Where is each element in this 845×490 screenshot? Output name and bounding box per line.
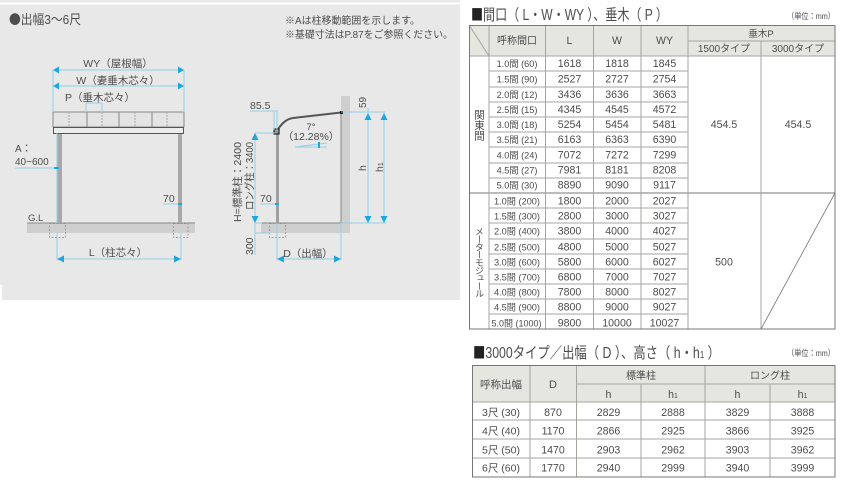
rows: metre module: 1.0間 (200) xyxy=(494,196,540,206)
rows: 3962 xyxy=(791,445,814,457)
rows: 2940 xyxy=(597,463,620,475)
dimension: h: h xyxy=(357,165,369,171)
rows: metre module: 3.5間 (700) xyxy=(494,272,540,282)
table header: WY xyxy=(656,35,673,47)
slope label: （12.28%） xyxy=(283,131,339,143)
rows: Kanto: 2.0間 (12) xyxy=(497,90,537,100)
rows: metre module: 4.5間 (900) xyxy=(494,303,540,313)
rows: Kanto: 7272 xyxy=(605,150,629,162)
rows: Kanto: 6390 xyxy=(653,134,676,146)
table header xyxy=(469,25,835,56)
rows: metre module: 8800 xyxy=(558,302,581,314)
roof xyxy=(53,112,184,134)
rows: 870 xyxy=(544,407,562,419)
dimension: W: W（妻垂木芯々） xyxy=(76,74,160,87)
dimension: H post height: ロング柱：3400 xyxy=(243,142,256,210)
table header: W xyxy=(612,35,622,47)
rows: metre module: 6800 xyxy=(558,271,581,283)
rows: metre module: 6027 xyxy=(653,256,676,268)
dimension: WY xyxy=(53,57,184,112)
dimension: W xyxy=(53,74,184,90)
rows: Kanto: 1845 xyxy=(653,58,676,70)
rows: metre module: 7800 xyxy=(558,286,581,298)
rows: metre module xyxy=(491,195,679,329)
rows: metre module: 5027 xyxy=(653,241,676,253)
rows: Kanto: 1.5間 (90) xyxy=(497,75,537,85)
rows: metre module: 5800 xyxy=(558,256,581,268)
dimension: 70 side: 70 xyxy=(260,193,272,205)
rows: metre module: 4.0間 (800) xyxy=(494,287,540,297)
rows: Kanto: 9117 xyxy=(653,180,676,192)
rows: metre module: 8000 xyxy=(605,286,629,298)
rows: 5尺 (50) xyxy=(482,445,520,457)
rows: metre module: 3.0間 (600) xyxy=(494,257,540,267)
label: G.L: G.L xyxy=(28,213,43,224)
rows: metre module: 10027 xyxy=(650,317,679,329)
dimension: H post height xyxy=(231,133,275,255)
dimension: H post height: H=標準柱：2400 xyxy=(231,142,244,222)
dimension: h1 xyxy=(374,112,388,223)
table header xyxy=(472,365,835,402)
rows: Kanto: 4572 xyxy=(653,104,676,116)
rows: 2999 xyxy=(661,463,685,475)
posts xyxy=(57,133,182,223)
rows: Kanto: 7072 xyxy=(558,150,581,162)
table header: L xyxy=(567,35,573,47)
rows: metre module: 4027 xyxy=(653,226,676,238)
slope label: 7° xyxy=(306,122,316,133)
rows: 3888 xyxy=(791,407,814,419)
merged cells: rafter pitch: 454.5 xyxy=(711,119,737,131)
dimension: P: P（垂木芯々） xyxy=(65,92,135,104)
table header: ロング柱 xyxy=(750,369,790,382)
rows: 2962 xyxy=(661,445,685,457)
table header: h xyxy=(606,389,612,401)
rows: metre module: 9000 xyxy=(605,302,629,314)
table header: h1 xyxy=(798,389,808,401)
rows: Kanto: 5254 xyxy=(558,119,581,131)
rows: metre module: 9800 xyxy=(558,317,581,329)
rows: 2925 xyxy=(661,426,685,438)
merged cells: rafter pitch: 500 xyxy=(715,256,733,268)
table header: h xyxy=(735,389,741,401)
dimension: D xyxy=(277,223,341,262)
text block: notes: ※Aは柱移動範囲を示します。 xyxy=(285,14,420,27)
rows: metre module: 9027 xyxy=(653,302,676,314)
dimension: D: D（出幅） xyxy=(283,247,333,260)
text block: notes xyxy=(285,14,453,41)
dimension: WY: WY（屋根幅） xyxy=(83,57,153,70)
merged cells: rafter pitch: 454.5 xyxy=(785,119,811,131)
heading: opening table: ■間口（ L・W・WY ）、垂木（ P ） xyxy=(471,3,668,25)
rows: metre module: 1.5間 (300) xyxy=(494,211,540,221)
rows: Kanto: 8181 xyxy=(605,165,629,177)
rows: 1470 xyxy=(541,445,565,457)
rows: Kanto: 2727 xyxy=(605,74,629,86)
rows: metre module: 3000 xyxy=(605,210,629,222)
rows: metre module: 3027 xyxy=(653,210,676,222)
dimension: 300 xyxy=(244,233,270,255)
table header: h1 xyxy=(668,389,678,401)
rows: 1170 xyxy=(542,426,564,438)
rows: Kanto: 1618 xyxy=(558,58,581,70)
rows: Kanto: 2.5間 (15) xyxy=(497,105,537,115)
rows: Kanto: 6363 xyxy=(605,134,629,146)
table header: 1500タイプ xyxy=(698,43,750,55)
rows: Kanto: 1818 xyxy=(605,58,629,70)
dimension: A: A： xyxy=(15,144,32,155)
heading: height table: ■3000タイプ／出幅（ D ）、高さ（ h・h1 ） xyxy=(473,341,720,363)
table grid xyxy=(469,25,835,329)
rows: metre module: 7000 xyxy=(605,271,629,283)
rows: Kanto: 7299 xyxy=(653,150,676,162)
rows: 3999 xyxy=(791,463,814,475)
rows: 2903 xyxy=(597,445,620,457)
row group label: Kanto: 関東間 xyxy=(473,109,485,141)
wall and ground xyxy=(261,96,350,238)
dimension: 59: 59 xyxy=(358,96,369,108)
rows: metre module: 2027 xyxy=(653,195,676,207)
rows: 3866 xyxy=(726,426,749,438)
post xyxy=(276,133,279,223)
rows: 2829 xyxy=(597,407,620,419)
rows: metre module: 2.0間 (400) xyxy=(494,227,540,237)
rows: Kanto: 5454 xyxy=(605,119,629,131)
dimension: 85.5: 85.5 xyxy=(250,100,271,112)
rows: Kanto: 9090 xyxy=(605,180,629,192)
dimension: 70: 70 xyxy=(163,193,175,205)
rows: Kanto: 3636 xyxy=(605,89,629,101)
table: opening dimensions xyxy=(469,25,835,329)
diagram: side elevation xyxy=(231,96,388,262)
diagram: front elevation xyxy=(15,57,195,262)
rows: Kanto: 1.0間 (60) xyxy=(497,59,537,69)
rows: metre module: 2800 xyxy=(558,210,581,222)
rows: Kanto: 8208 xyxy=(653,165,676,177)
ground xyxy=(27,223,195,238)
unit label: height table: （単位：mm） xyxy=(787,348,835,358)
rows: Kanto: 3436 xyxy=(558,89,581,101)
rows: metre module: 5000 xyxy=(605,241,629,253)
heading: projection range: ●出幅3〜6尺 xyxy=(9,9,81,28)
rows: Kanto: 5481 xyxy=(653,119,676,131)
unit label: opening table: （単位：mm） xyxy=(787,11,835,21)
rows: 6尺 (60) xyxy=(482,463,520,475)
row group label: metre module: メーターモジュール xyxy=(474,227,484,297)
rows: metre module: 6000 xyxy=(605,256,629,268)
rows: metre module: 3800 xyxy=(558,226,581,238)
dimension: 70 side xyxy=(260,193,279,205)
table header: 呼称出幅 xyxy=(480,378,522,391)
rows: Kanto: 4345 xyxy=(558,104,581,116)
panel: dimension diagrams background xyxy=(0,0,460,300)
table header: D xyxy=(549,379,557,391)
dimension: A: 40~600 xyxy=(15,157,49,168)
table header: 3000タイプ xyxy=(772,43,824,55)
table header: 呼称間口 xyxy=(497,34,537,47)
text block: notes: ※基礎寸法はP.87をご参照ください。 xyxy=(285,28,453,41)
dimension: 300: 300 xyxy=(244,237,256,255)
rows: Kanto: 3.5間 (21) xyxy=(497,135,537,145)
rows: metre module: 8027 xyxy=(653,286,676,298)
dimension: L xyxy=(57,233,181,262)
rows: metre module: 2.5間 (500) xyxy=(494,242,540,252)
rows: 3尺 (30) xyxy=(482,407,520,419)
roof curve xyxy=(274,111,343,134)
dimension: 59 xyxy=(341,96,385,112)
rows: 2866 xyxy=(597,426,620,438)
rows: Kanto: 3.0間 (18) xyxy=(497,120,537,130)
rows: metre module: 7027 xyxy=(653,271,676,283)
dimension: L: L（柱芯々） xyxy=(89,246,147,259)
rows xyxy=(482,407,814,475)
rows: 3829 xyxy=(726,407,749,419)
rows: metre module: 2000 xyxy=(605,195,629,207)
rows: 3903 xyxy=(726,445,749,457)
rows: metre module: 4000 xyxy=(605,226,629,238)
table grid xyxy=(472,365,835,477)
rows: metre module: 10000 xyxy=(602,317,632,329)
rows: Kanto: 5.0間 (30) xyxy=(497,181,537,191)
rows: Kanto: 4.0間 (24) xyxy=(497,151,537,161)
dimension: P xyxy=(65,92,135,112)
merged cells: rafter pitch xyxy=(711,119,835,329)
dimension: 70 xyxy=(163,193,182,205)
dimension: 85.5 xyxy=(250,100,278,130)
rows: metre module: 4800 xyxy=(558,241,581,253)
rows: 2888 xyxy=(661,407,685,419)
dimension: A xyxy=(15,133,59,223)
rows: 4尺 (40) xyxy=(482,426,520,438)
rows: Kanto: 6163 xyxy=(558,134,581,146)
table header: 標準柱 xyxy=(626,369,656,382)
rows: metre module: 1800 xyxy=(558,195,581,207)
rows: Kanto: 2527 xyxy=(558,74,581,86)
rows: Kanto: 2754 xyxy=(653,74,676,86)
rows: Kanto: 4.5間 (27) xyxy=(497,166,537,176)
rows: 3940 xyxy=(726,463,749,475)
dimension: h1: h1 xyxy=(374,162,386,172)
rows: 1770 xyxy=(541,463,565,475)
table header: 垂木P xyxy=(748,28,774,40)
slope label xyxy=(283,122,339,148)
rows: Kanto: 3663 xyxy=(653,89,676,101)
rows: Kanto: 4545 xyxy=(605,104,629,116)
rows: metre module: 5.0間 (1000) xyxy=(491,318,542,328)
table: projection and height xyxy=(472,365,835,477)
rows: Kanto: 7981 xyxy=(558,165,581,177)
rows: Kanto xyxy=(497,58,676,192)
rows: 3925 xyxy=(791,426,814,438)
rows: Kanto: 8890 xyxy=(558,180,581,192)
dimension: h xyxy=(341,112,386,223)
